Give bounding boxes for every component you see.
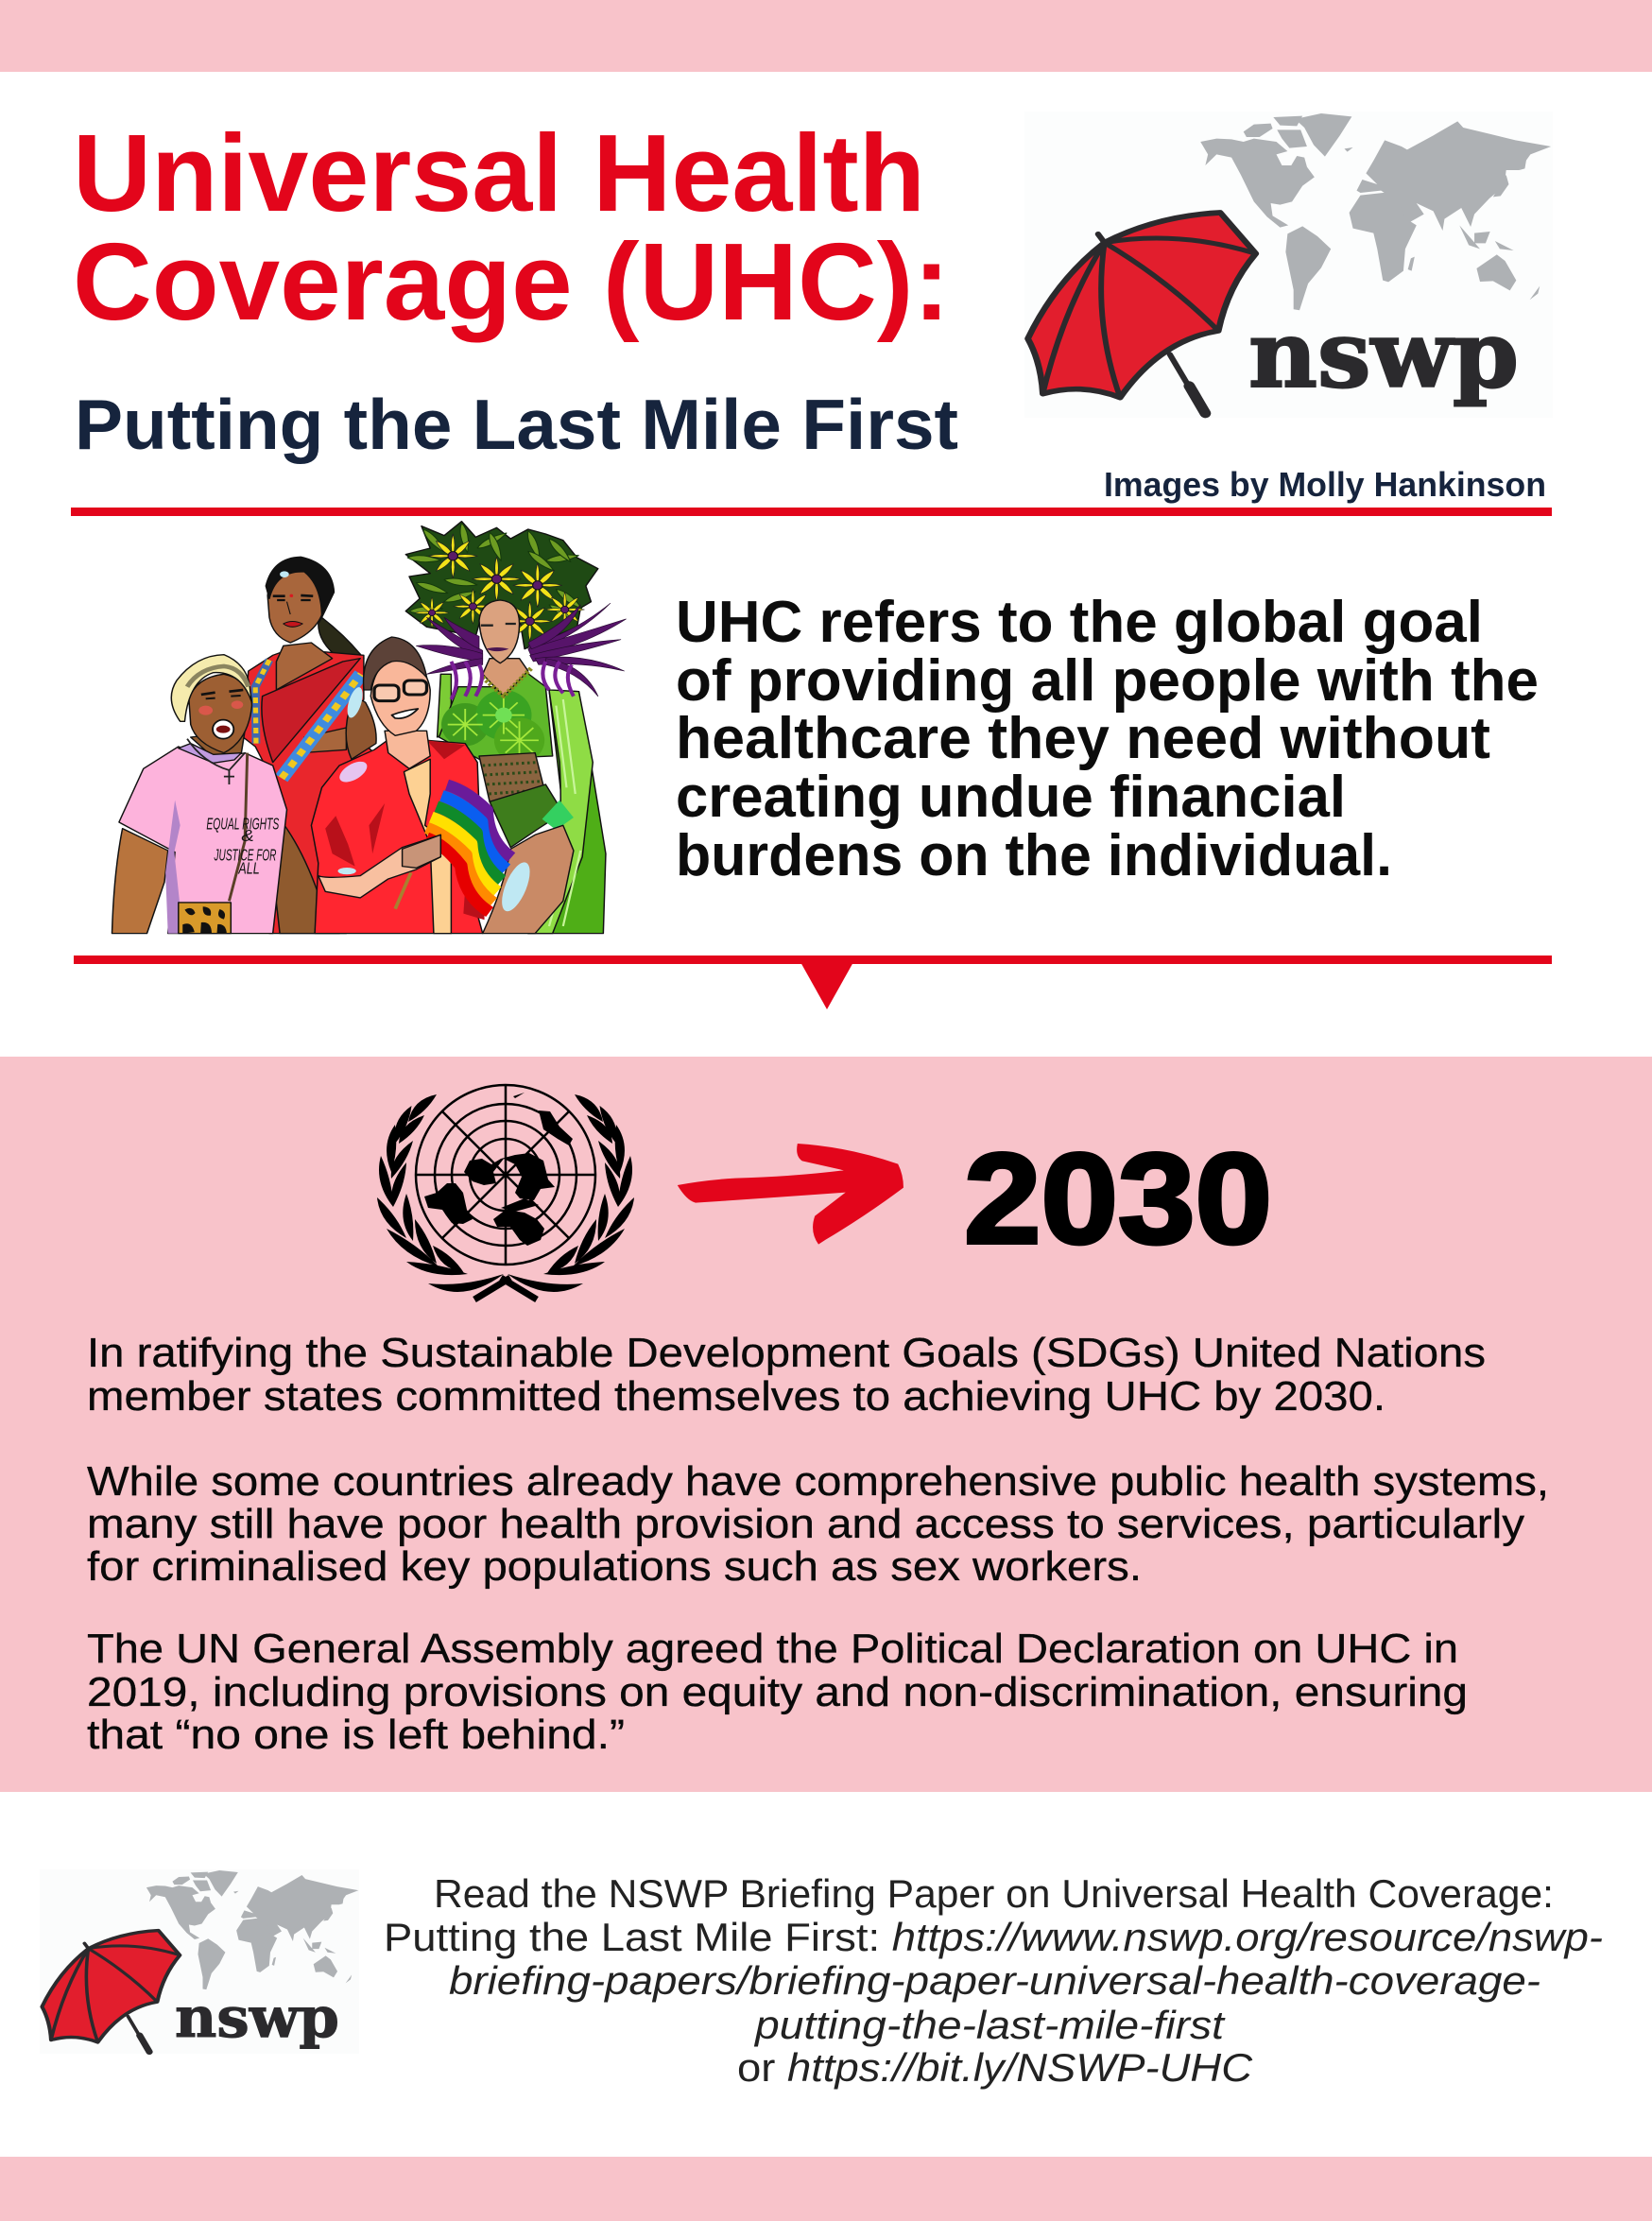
laurel wreath, left side: [377, 1094, 504, 1292]
intro text block: UHC refers to the global goal: [676, 590, 1483, 655]
text: SDG commitment paragraph: In ratifying the Sustainable Development Goals (SDGs) United Nations: [87, 1330, 1486, 1376]
figure: person in pink shirt: [112, 655, 339, 934]
shirt slogan: JUSTICE FOR: [214, 846, 277, 865]
text: health systems paragraph: [87, 1458, 1549, 1590]
intro text block: burdens on the individual.: [676, 823, 1392, 888]
top band: [0, 0, 1652, 72]
figure: woman in red saree: [243, 557, 378, 934]
intro text block: creating undue financial: [676, 765, 1346, 830]
title: Universal Health Coverage (UHC): Coverage (UHC):: [73, 220, 950, 343]
text: briefing paper reference: Read the NSWP Briefing Paper on Universal Health Coverage:: [434, 1871, 1554, 1916]
text: health systems paragraph: for criminalised key populations such as sex workers.: [87, 1543, 1142, 1590]
text: health systems paragraph: While some countries already have comprehensive public health systems,: [87, 1458, 1549, 1505]
figure: person in red shirt with rainbow flag: [311, 637, 511, 934]
wreath stems: [474, 1278, 537, 1300]
shirt slogan: &: [241, 827, 254, 846]
icon: UN emblem: [377, 1085, 634, 1300]
logo: NSWP header: [1024, 112, 1553, 418]
subtitle: Putting the Last Mile First: [75, 385, 958, 464]
logo: NSWP footer: nswp: [175, 1985, 339, 2050]
divider: rule with downward pointer: [74, 956, 1552, 1009]
logo: NSWP header: nswp: [1248, 301, 1519, 408]
laurel wreath, right side: [508, 1094, 634, 1292]
panel: pink 2030 commitment: [0, 1057, 1652, 1792]
text: political declaration paragraph: 2019, including provisions on equity and non-discrimination, ensuring: [87, 1669, 1468, 1715]
text: briefing paper reference: [384, 1871, 1603, 2090]
title: Universal Health Coverage (UHC): Universal Health: [73, 112, 925, 234]
title: Universal Health Coverage (UHC): [73, 112, 950, 343]
heading: 2030: 2030: [964, 1127, 1272, 1270]
shirt slogan: ALL: [238, 859, 260, 878]
intro text block: of providing all people with the: [676, 648, 1539, 714]
bottom band: [0, 2157, 1652, 2221]
text: briefing paper reference: putting-the-last-mile-first: [753, 2003, 1227, 2047]
logo: NSWP footer: [40, 1869, 359, 2054]
shirt slogan: EQUAL RIGHTS: [206, 815, 280, 834]
intro text block: healthcare they need without: [676, 706, 1490, 771]
text: political declaration paragraph: that “no one is left behind.”: [87, 1712, 625, 1758]
arrow: red brush stroke: [678, 1144, 903, 1245]
illustration: four sex workers: [112, 522, 626, 934]
shirt slogan: [206, 815, 280, 878]
text: political declaration paragraph: The UN General Assembly agreed the Political Declaration on UHC in: [87, 1626, 1458, 1672]
text: SDG commitment paragraph: [87, 1330, 1486, 1420]
credit: images by: Images by Molly Hankinson: [1104, 465, 1546, 504]
intro text block: [676, 590, 1539, 888]
text: briefing paper reference: briefing-papers/briefing-paper-universal-health-coverage-: [449, 1958, 1540, 2003]
text: political declaration paragraph: [87, 1626, 1468, 1758]
text: health systems paragraph: many still have poor health provision and access to services, particularly: [87, 1501, 1524, 1547]
figure: woman in flower headdress: [405, 522, 626, 934]
text: SDG commitment paragraph: member states committed themselves to achieving UHC by 2030.: [87, 1373, 1385, 1420]
divider: top red rule: [71, 508, 1552, 516]
text: briefing paper reference: or https://bit.ly/NSWP-UHC: [737, 2045, 1253, 2090]
text: briefing paper reference: Putting the Last Mile First: https://www.nswp.org/resource/nswp-: [384, 1915, 1603, 1959]
